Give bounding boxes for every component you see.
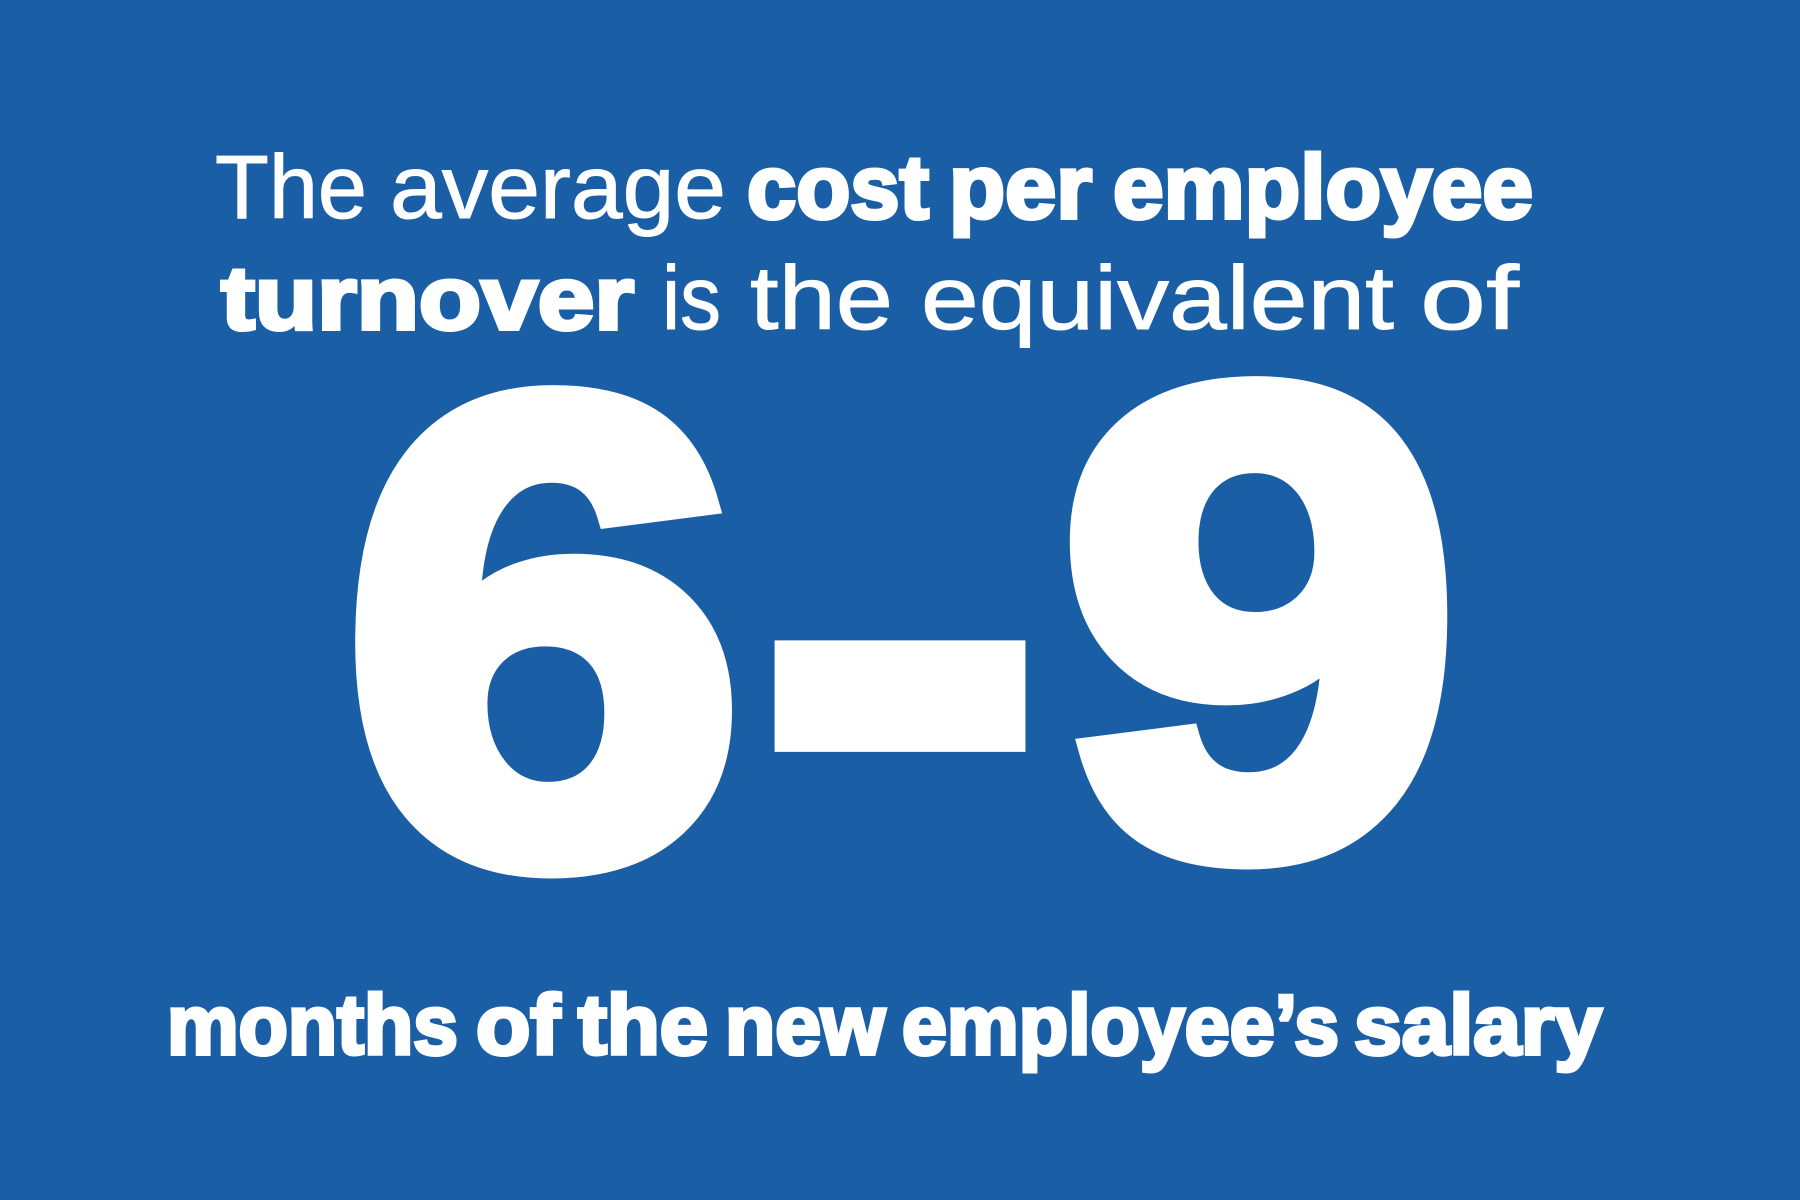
heading: cost per employee turnover statement: the xyxy=(750,249,893,349)
closing text: months of the new employee's salary: the xyxy=(578,978,708,1072)
heading: cost per employee turnover statement: cost xyxy=(747,138,929,238)
closing text: months of the new employee's salary: employee’s xyxy=(902,978,1339,1072)
heading: cost per employee turnover statement xyxy=(215,138,1533,349)
heading: cost per employee turnover statement: average xyxy=(390,138,726,238)
closing text: months of the new employee's salary xyxy=(167,978,1602,1072)
closing text: months of the new employee's salary: months xyxy=(167,978,458,1072)
closing text: months of the new employee's salary: salary xyxy=(1354,978,1602,1072)
closing text: months of the new employee's salary: new xyxy=(725,978,886,1072)
heading: cost per employee turnover statement: employee xyxy=(1113,138,1533,238)
big number: 6-9: 9 xyxy=(1059,253,1460,990)
big number: 6-9: 6 xyxy=(343,262,744,999)
big number: 6-9: - xyxy=(736,92,1065,1137)
heading: cost per employee turnover statement: The xyxy=(215,138,367,238)
heading: cost per employee turnover statement: equivalent xyxy=(921,249,1394,349)
heading: cost per employee turnover statement: of xyxy=(1420,249,1520,349)
closing text: months of the new employee's salary: of xyxy=(476,978,561,1072)
heading: cost per employee turnover statement: is xyxy=(662,249,721,349)
heading: cost per employee turnover statement: per xyxy=(949,138,1092,238)
heading: cost per employee turnover statement: turnover xyxy=(221,249,634,349)
big number: 6-9 xyxy=(343,92,1460,1137)
